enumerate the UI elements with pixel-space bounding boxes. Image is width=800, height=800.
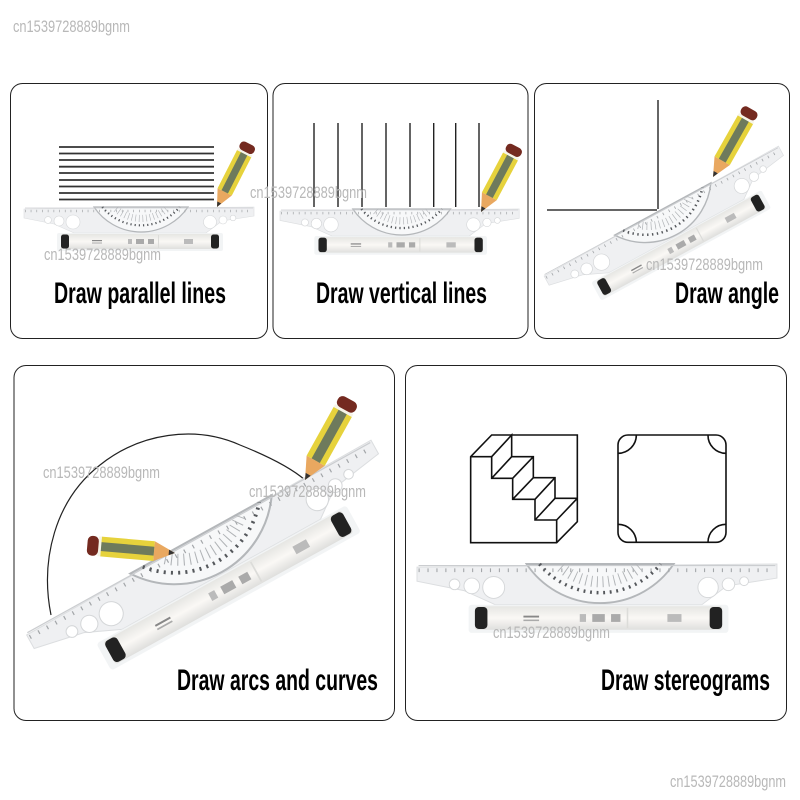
diagram: rounded square <box>618 435 726 542</box>
panel: draw stereograms <box>406 366 786 720</box>
watermark: top left: cn1539728889bgnm <box>13 17 130 36</box>
caption: Draw vertical lines <box>316 277 487 310</box>
watermark: cn1539728889bgnm <box>250 183 367 202</box>
vertical lines <box>314 123 479 207</box>
icon: pencil <box>474 142 523 216</box>
watermark: cn1539728889bgnm <box>43 463 160 482</box>
icon: pencil <box>210 140 256 211</box>
ruler <box>24 207 254 251</box>
angle lines <box>547 100 658 210</box>
parallel lines <box>59 147 214 200</box>
watermark: cn1539728889bgnm <box>493 623 610 642</box>
ruler <box>280 209 519 255</box>
diagram: stairs <box>471 435 577 543</box>
caption: Draw parallel lines <box>54 277 226 310</box>
ruler <box>543 146 800 319</box>
arc <box>48 434 305 615</box>
icon: pencil left <box>86 535 176 563</box>
panel: draw arcs and curves <box>14 366 408 720</box>
icon: pencil top <box>296 394 359 485</box>
watermark: cn1539728889bgnm <box>44 245 161 264</box>
panel: draw angle <box>534 84 800 338</box>
ruler <box>417 564 777 633</box>
watermark: cn1539728889bgnm <box>646 255 763 274</box>
ruler <box>25 440 408 698</box>
panel: draw parallel lines <box>10 84 268 338</box>
watermark: cn1539728889bgnm <box>249 482 366 501</box>
icon: pencil <box>705 105 759 181</box>
panel: draw vertical lines <box>250 84 528 338</box>
caption: Draw arcs and curves <box>177 664 378 697</box>
